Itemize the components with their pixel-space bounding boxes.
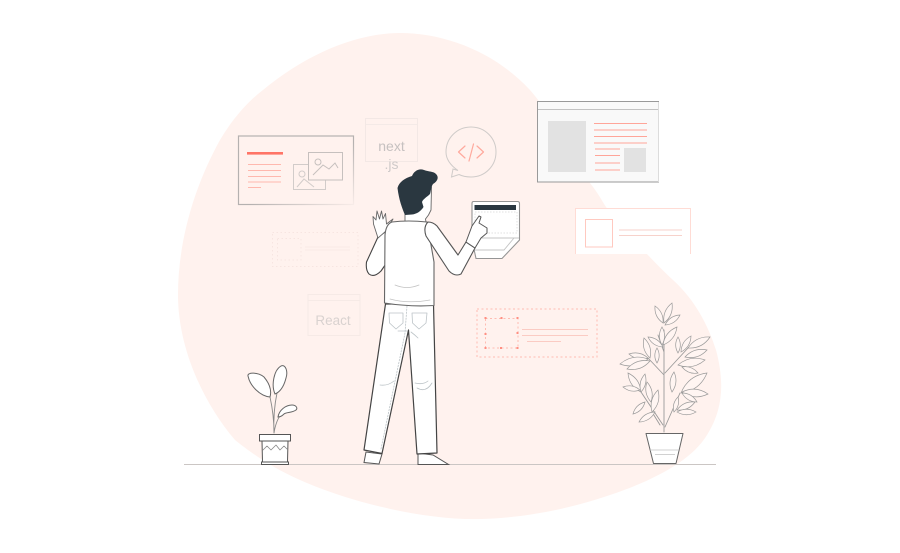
- card frame: [238, 136, 354, 204]
- card heading bar: [247, 152, 283, 155]
- window frame: [366, 118, 418, 162]
- browser text lines: [594, 124, 647, 170]
- sweater torso: [384, 221, 434, 306]
- next.js label: next: [378, 138, 405, 154]
- window title rule: [308, 300, 360, 302]
- panel: red dashed wireframe: [477, 309, 597, 357]
- ground line: [184, 464, 716, 466]
- person: [364, 169, 487, 464]
- left plant: [248, 366, 297, 464]
- dashed outer frame: [477, 309, 597, 357]
- square placeholder: [586, 220, 612, 247]
- dashed outer frame: [272, 232, 358, 266]
- tablet: [472, 202, 520, 258]
- stem and branches: [641, 330, 688, 432]
- window frame: [308, 294, 360, 336]
- faint text lines: [305, 247, 350, 250]
- card text lines: [248, 164, 281, 188]
- leaves: [619, 302, 712, 424]
- left shoe: [364, 452, 382, 464]
- browser header rule: [538, 108, 658, 110]
- pointing arm: [425, 222, 475, 275]
- panel: React window: [308, 294, 360, 336]
- background blob: [178, 33, 721, 519]
- panel: large browser window: [538, 102, 659, 182]
- pot body: [262, 441, 288, 462]
- right shoe: [418, 453, 448, 464]
- pot rim: [260, 434, 290, 441]
- icon: code brackets: [458, 144, 484, 161]
- panel: faint dashed wireframe: [272, 232, 358, 266]
- neck and face: [405, 187, 432, 222]
- panel: white card with square: [575, 208, 691, 254]
- tablet dark header: [474, 205, 516, 210]
- stems: [270, 393, 282, 433]
- trousers: [364, 304, 437, 454]
- next.js label suffix: .js: [384, 156, 398, 172]
- large image placeholder: [548, 121, 586, 172]
- pot zigzag: [263, 445, 287, 450]
- trouser pockets and seams: [380, 306, 432, 449]
- dashed inner square: [278, 238, 301, 260]
- React label: React: [315, 313, 351, 328]
- icon: back picture frame: [294, 164, 326, 190]
- hair: [398, 169, 438, 215]
- small right leaf: [278, 405, 297, 417]
- small image placeholder: [624, 148, 646, 172]
- speech bubble with code icon: [446, 127, 496, 177]
- left forearm and upper arm: [366, 225, 392, 275]
- tall leaf: [273, 366, 287, 394]
- tablet keyboard fold: [473, 238, 519, 250]
- card background: [575, 208, 691, 254]
- raised hand: [373, 211, 393, 238]
- icon: front picture frame: [308, 152, 342, 180]
- browser frame: [538, 102, 659, 182]
- browser right edge: [658, 102, 660, 182]
- card border: [576, 208, 690, 254]
- large left leaf: [248, 373, 271, 397]
- pot stripes: [650, 450, 679, 454]
- panel: next.js window: [366, 118, 418, 172]
- window title bar: [366, 124, 417, 126]
- sweater creases: [390, 285, 430, 302]
- dashed inner square: [486, 318, 518, 348]
- selection handles: [484, 317, 518, 349]
- panel: image and text card: [238, 136, 354, 204]
- card text lines: [619, 230, 682, 236]
- text lines: [522, 330, 588, 342]
- pointing hand: [466, 216, 487, 248]
- tablet body: [472, 202, 520, 258]
- right plant: [619, 302, 712, 464]
- flower pot: [646, 434, 683, 464]
- tablet dashed content: [475, 212, 517, 233]
- pot saucer: [262, 462, 288, 464]
- bubble outline: [446, 127, 496, 177]
